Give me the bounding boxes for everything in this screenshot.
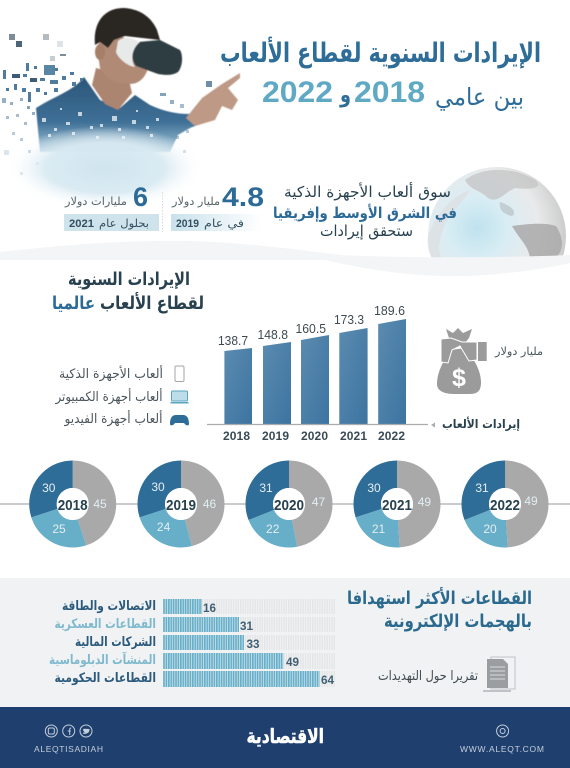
mist [5,126,205,210]
sector labels: القطاعات العسكرية [54,617,156,632]
year labels: 2019 [262,429,289,443]
panel: most targeted sectors [0,578,570,708]
year 2019: 2019 [176,218,199,230]
icon: computer [170,391,188,404]
icon: money bag [437,328,487,394]
illustration: man with VR headset [2,8,240,210]
year 2022: 2022 [262,76,333,109]
year 2018: 2018 [354,76,425,109]
social handle: ALEQTISADIAH [34,744,103,754]
panel background [0,578,570,708]
year labels: 2020 [301,429,328,443]
bar chart [207,303,520,443]
bar values: 49 [286,657,299,669]
donut 2019: 30 [151,480,165,494]
sector labels: المنشآت الدبلوماسية [49,651,156,668]
figure [36,8,240,152]
value labels: 173.3 [334,312,364,327]
donut 2021: 49 [418,495,431,509]
website: WWW.ALEQT.COM [460,744,544,754]
value labels [218,303,405,348]
donut 2021: 30 [367,481,381,495]
horizontal bar chart [49,599,335,687]
panel heading: القطاعات الأكثر استهدافا [347,587,532,609]
value labels: 189.6 [374,303,405,318]
footer [0,707,570,768]
donut 2018: 30 [42,481,56,495]
sector labels [49,599,156,686]
heading line 2: لقطاع الألعاب [100,292,204,314]
donut 2018 [42,474,107,536]
donut 2019 [151,474,216,534]
donut 2021: 2021 [382,497,412,514]
donut 2020: 47 [312,495,325,509]
donut 2020: 2020 [274,497,304,514]
market text line 2: في الشرق الأوسط وإفريقيا [273,204,457,222]
panel heading [347,587,532,632]
footer background [0,707,570,768]
donut 2019: 2019 [166,497,196,514]
donut 2019: 46 [203,497,216,511]
title [220,36,541,111]
bar values: 64 [321,675,335,687]
donut 2020: 22 [266,522,280,536]
background wave [0,241,570,276]
unit label: مليار دولار [494,345,543,358]
bar tracks [163,599,335,687]
value labels: 148.8 [258,327,288,342]
donut 2021 [367,474,431,536]
band 2021 [64,214,159,231]
legend label video: ألعاب أجهزة الفيديو [64,410,162,427]
value labels: 138.7 [218,333,248,348]
icon: web [497,725,509,737]
title line 2 label: بين عامي [435,83,524,111]
year 2021: 2021 [69,218,94,230]
donut 2022: 2022 [490,497,520,514]
sector labels: الاتصالات والطاقة [62,599,156,614]
bar values: 33 [246,639,260,651]
year labels: 2021 [340,429,367,443]
heading highlight: عالميا [52,293,95,314]
in year: في عام [204,217,244,230]
donut 2022: 49 [524,494,538,508]
logo: الاقتصادية [246,724,324,748]
band 2019 [171,214,262,231]
year labels: 2018 [223,429,250,443]
heading line 1: الإيرادات السنوية [68,269,190,290]
conjunction: و [339,83,351,108]
donut 2022: 31 [475,481,489,495]
donut 2019: 24 [157,520,171,534]
donut 2020: 31 [259,481,273,495]
axis [207,424,428,426]
unit billion dollars: مليار دولار [171,195,220,208]
stat 4.8 [171,182,264,231]
value labels: 160.5 [296,321,326,336]
report caption: تقريرا حول التهديدات [378,669,478,684]
icon: globe [428,167,566,258]
sector labels: الشركات المالية [75,635,156,650]
bar values: 16 [203,603,216,615]
panel: Middle East and Africa market [64,182,457,240]
year labels: 2022 [378,429,405,443]
value 4.8: 4.8 [222,182,264,212]
timeline line [0,503,570,505]
bar values: 31 [240,621,254,633]
icon: document [483,657,515,692]
bar values [203,603,335,687]
icon: smartphone [175,366,184,382]
legend label smart devices: ألعاب الأجهزة الذكية [59,365,163,382]
year labels [223,429,405,443]
donut 2018: 45 [93,497,107,511]
legend [55,365,189,427]
donut 2018: 2018 [58,497,88,514]
panel heading: بالهجمات الإلكترونية [384,611,532,632]
icon: money bag: $ [452,364,466,392]
value 6: 6 [133,182,148,212]
legend label computer: ألعاب أجهزة الكمبيوتر [55,388,163,405]
bars [224,319,406,424]
by year: بحلول عام [99,217,149,230]
heading: global annual revenue [52,269,204,314]
stat 6 [64,182,159,231]
market text line 1: سوق ألعاب الأجهزة الذكية [284,182,451,201]
donut 2020 [259,474,325,536]
icon: gamepad [170,415,189,425]
unit billions dollars: مليارات دولار [64,195,127,208]
donut 2022 [475,474,538,536]
donut 2022: 20 [483,522,497,536]
dispersed pixels [2,34,212,175]
white speckle through shirt [42,108,159,139]
market text line 3: ستحقق إيرادات [320,222,413,240]
sector labels: القطاعات الحكومية [54,671,156,686]
axis arrow [431,422,435,428]
donut 2021: 21 [372,522,385,536]
axis title: إيرادات الألعاب [442,416,520,431]
bar fills [163,599,320,687]
donut 2018: 25 [52,522,66,536]
social icons [45,725,92,737]
